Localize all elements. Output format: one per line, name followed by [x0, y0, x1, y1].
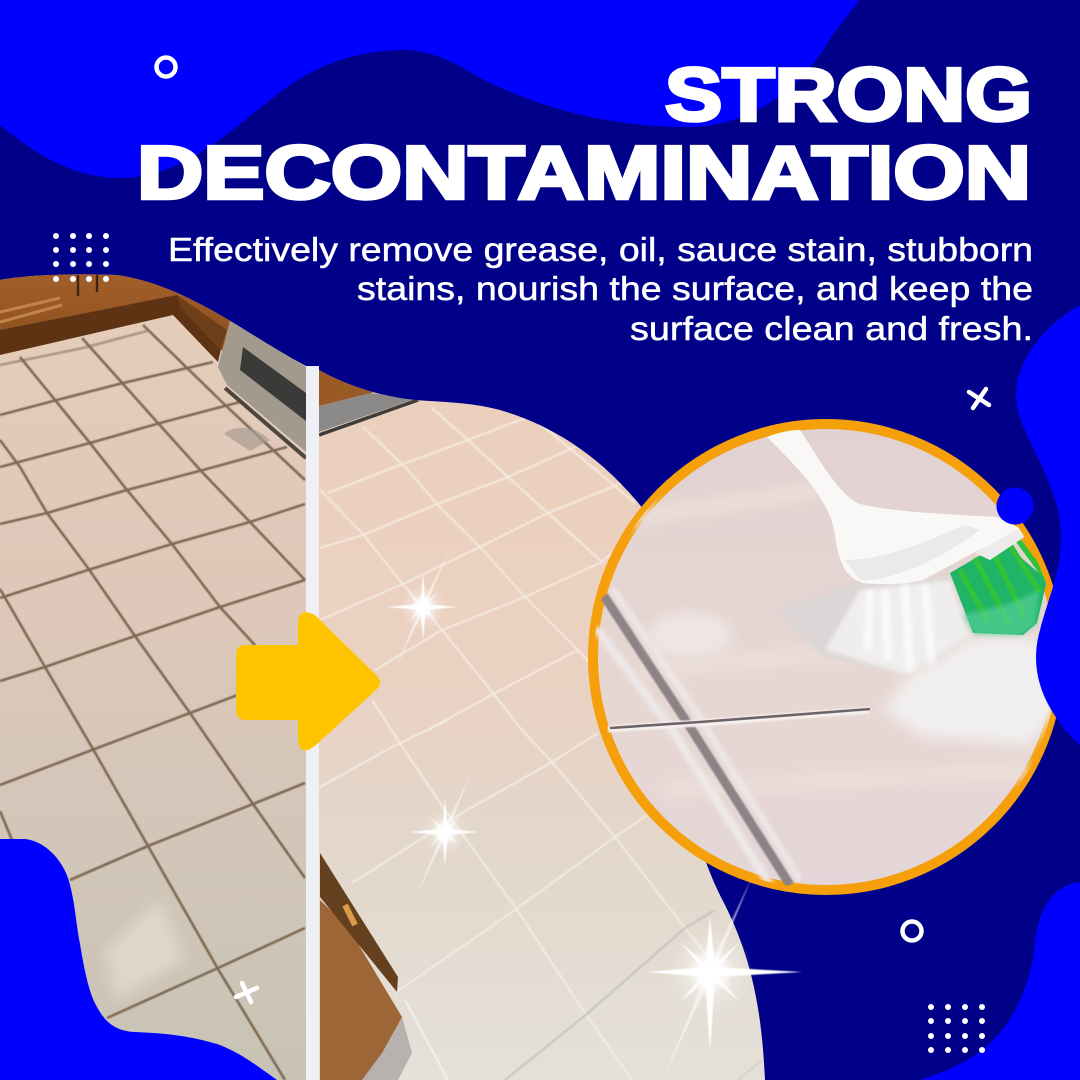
orange ring and tile — [593, 424, 1059, 890]
description text: stains, nourish the surface, and keep the — [357, 270, 1033, 307]
description text: Effectively remove grease, oil, sauce stain, stubborn — [168, 231, 1033, 268]
tile streaks — [620, 490, 1030, 790]
icon: cross right — [969, 389, 989, 408]
divider bar — [306, 366, 319, 1080]
title: DECONTAMINATION — [137, 130, 1031, 214]
wood and skirting top right — [319, 366, 418, 435]
wooden cabinet bottom — [320, 853, 412, 1080]
tile base — [0, 270, 306, 1080]
glare on lower tile — [106, 906, 182, 996]
clean tile base — [319, 360, 779, 1080]
panel: after floor photo — [319, 360, 779, 1080]
icon: ring bottom right — [902, 922, 922, 940]
title: STRONG — [665, 52, 1032, 136]
blob: top bright blue — [0, 0, 860, 178]
dot: blue accent on ring — [996, 488, 1034, 524]
green bristles — [950, 540, 1047, 636]
title — [137, 52, 1032, 214]
blob: bottom left — [0, 839, 277, 1080]
blob: bottom right — [920, 882, 1080, 1080]
circle photo: scrubbing brush — [593, 424, 1060, 890]
foam — [648, 577, 1060, 745]
grout lines — [596, 588, 870, 885]
arrow — [236, 612, 380, 750]
icon: cross bottom left — [236, 983, 257, 1002]
floor heater — [218, 320, 306, 458]
brush handle — [767, 430, 1024, 584]
sparkle: lower — [409, 774, 479, 894]
icon: ring top left — [156, 58, 176, 76]
blob: right bright blue — [1016, 305, 1080, 745]
brown grout lines — [0, 325, 305, 1080]
dot grid: bottom right — [928, 1004, 985, 1053]
panel: before floor photo — [0, 270, 306, 1080]
sparkle: upper — [387, 551, 457, 669]
dot grid: top left — [53, 233, 109, 282]
white grout lines — [320, 408, 762, 1080]
wooden cabinet — [0, 270, 240, 362]
sparkle: large bottom — [648, 877, 802, 1077]
description text — [168, 231, 1033, 347]
description text: surface clean and fresh. — [630, 310, 1033, 347]
